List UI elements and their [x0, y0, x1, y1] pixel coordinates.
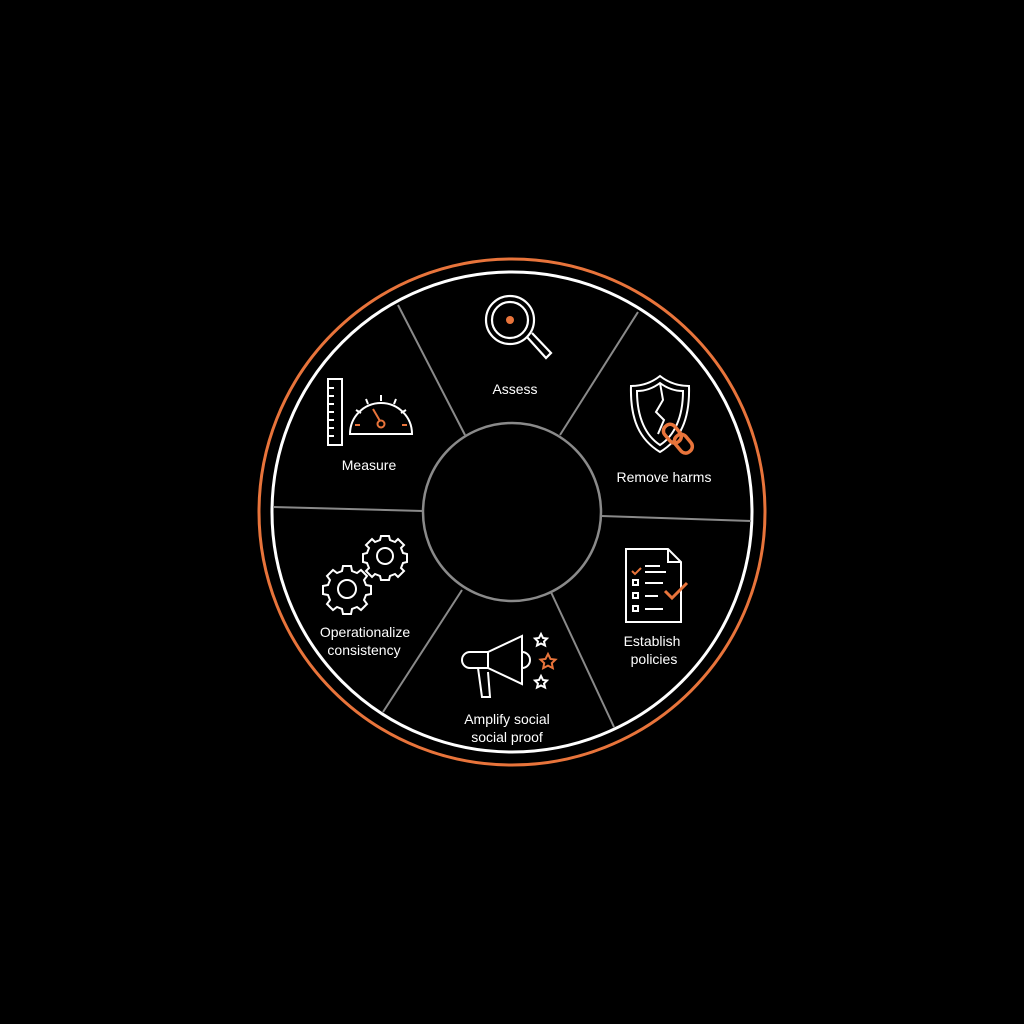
wheel diagram [259, 259, 765, 765]
segment: operationalize consistency: consistency [327, 642, 401, 658]
icon: checklist document [626, 549, 687, 622]
label: remove harms: Remove harms [617, 469, 711, 485]
label: measure: Measure [342, 457, 396, 473]
label: amplify social proof: Amplify social [464, 711, 550, 727]
outer orange ring [259, 259, 765, 765]
icon: shield with chain [631, 376, 695, 456]
label: establish policies: Establish [624, 633, 680, 649]
label: assess: Assess [492, 381, 538, 397]
segment: amplify social proof [462, 634, 556, 745]
segment: amplify social proof: social proof [471, 729, 543, 745]
icon: megaphone with stars [462, 634, 556, 697]
segment: assess [486, 296, 551, 397]
inner hub circle [423, 423, 601, 601]
segment: establish policies [624, 549, 687, 667]
segment: operationalize consistency [320, 536, 410, 658]
white ring [272, 272, 752, 752]
icon: magnifier [486, 296, 551, 358]
segment: measure [328, 379, 412, 473]
icon: gears [323, 536, 407, 614]
label: operationalize consistency: Operationalize [320, 624, 410, 640]
segment: remove harms [617, 376, 711, 485]
segment: establish policies: policies [631, 651, 677, 667]
icon: ruler and gauge [328, 379, 412, 445]
